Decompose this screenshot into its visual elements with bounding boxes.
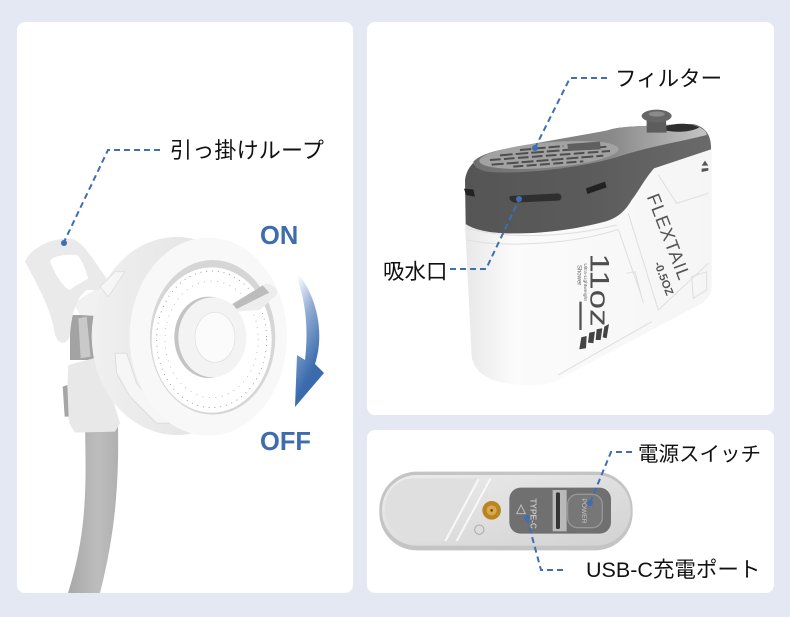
leader line: filter — [535, 78, 607, 148]
label: ON: ON — [260, 222, 298, 250]
panel seams — [466, 175, 708, 375]
leader line: power — [590, 452, 632, 503]
illustration: water bag device: Shower — [575, 265, 581, 285]
lid top surface — [473, 125, 707, 173]
label: USB-C port: USB-C充電ポート — [586, 558, 760, 582]
leader line: usb — [527, 518, 563, 570]
panel: water tank — [367, 22, 774, 415]
illustration: water bag device: Ultra-Lightweight — [582, 263, 588, 301]
hook loop — [25, 238, 107, 343]
leader dot — [587, 500, 593, 506]
leader dot — [524, 515, 530, 521]
indicator — [475, 525, 484, 534]
hinge — [70, 315, 100, 360]
power button — [568, 494, 602, 528]
illustration: port plate: POWER — [580, 498, 587, 524]
weight text: 11oz — [585, 253, 615, 327]
panel: shower head — [17, 22, 353, 593]
charging contact — [482, 501, 501, 520]
grille latch — [567, 142, 601, 151]
illustration: water bag device: -0.5OZ — [651, 260, 675, 297]
rubber cover — [509, 488, 611, 534]
lever — [230, 284, 277, 312]
filter grille — [478, 136, 620, 174]
illustration: port plate — [379, 472, 633, 550]
dark lid — [465, 124, 711, 233]
label: power switch: 電源スイッチ — [638, 443, 761, 466]
white body — [465, 148, 712, 385]
slot — [553, 490, 567, 531]
stripes — [579, 324, 609, 349]
water inlet slots — [509, 193, 562, 203]
leader line: loop — [64, 150, 160, 242]
clamp body — [67, 357, 120, 433]
marks — [702, 161, 708, 172]
type-c marks: TYPE-C — [529, 498, 539, 529]
leader line: inlet — [450, 200, 519, 269]
label: inlet: 吸水口 — [383, 260, 448, 284]
illustration: water bag device — [464, 110, 712, 385]
brand text: FLEXTAIL — [643, 191, 695, 283]
valve — [663, 124, 699, 132]
illustration: shower head with hook loop — [25, 237, 287, 436]
label: filter: フィルター — [615, 67, 722, 91]
head back — [92, 237, 262, 435]
leader dot — [61, 240, 67, 246]
knob — [174, 297, 242, 378]
leader dot — [532, 145, 538, 151]
arrow: rotate on to off — [293, 268, 324, 407]
head front ring — [130, 238, 287, 436]
panel: ports — [367, 430, 774, 593]
label: hook loop: 引っ掛けループ — [170, 138, 324, 163]
hose — [68, 425, 118, 593]
leader dot — [516, 196, 522, 202]
inner ring — [150, 260, 275, 415]
nozzle dots — [157, 271, 267, 408]
plate — [379, 472, 633, 550]
label: OFF: OFF — [260, 428, 311, 456]
plate divider — [385, 478, 477, 541]
